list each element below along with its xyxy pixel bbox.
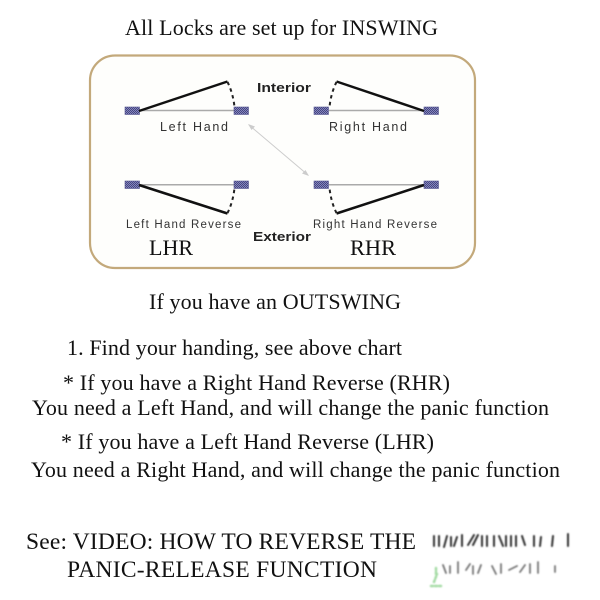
heading: outswing: If you have an OUTSWING xyxy=(149,289,401,314)
diagram: Left Hand Reverse: Left Hand Reverse xyxy=(126,219,241,231)
label: Exterior: Exterior xyxy=(253,229,311,244)
label: RHR: RHR xyxy=(350,235,396,260)
arrow: diagonal double-headed xyxy=(248,124,309,176)
diagram: Right Hand xyxy=(314,82,438,134)
diagram: Right Hand Reverse xyxy=(313,181,438,231)
diagram: Right Hand Reverse: Right Hand Reverse xyxy=(313,219,437,231)
note: right hand reverse xyxy=(32,370,549,420)
note: left hand reverse: You need a Right Hand, and will change the panic function xyxy=(31,457,560,482)
title: All Locks are set up for INSWING xyxy=(125,15,438,40)
panel: door handing chart xyxy=(90,56,475,268)
note: right hand reverse: You need a Left Hand, and will change the panic function xyxy=(32,395,549,420)
video reference xyxy=(26,529,416,583)
note: left hand reverse: * If you have a Left Hand Reverse (LHR) xyxy=(61,429,434,454)
diagram: Left Hand Reverse xyxy=(125,181,248,231)
label: LHR: LHR xyxy=(149,235,193,260)
diagram: Left Hand: Left Hand xyxy=(160,120,228,134)
video reference: See: VIDEO: HOW TO REVERSE THE xyxy=(26,529,416,555)
video reference: PANIC-RELEASE FUNCTION xyxy=(67,557,377,583)
label: Interior: Interior xyxy=(257,80,311,95)
diagram: Right Hand: Right Hand xyxy=(329,120,407,134)
step 1: 1. Find your handing, see above chart xyxy=(67,335,402,360)
obscured smudged text xyxy=(431,534,568,586)
note: left hand reverse xyxy=(31,429,560,482)
diagram: Left Hand xyxy=(125,82,248,134)
note: right hand reverse: * If you have a Right Hand Reverse (RHR) xyxy=(63,370,450,395)
